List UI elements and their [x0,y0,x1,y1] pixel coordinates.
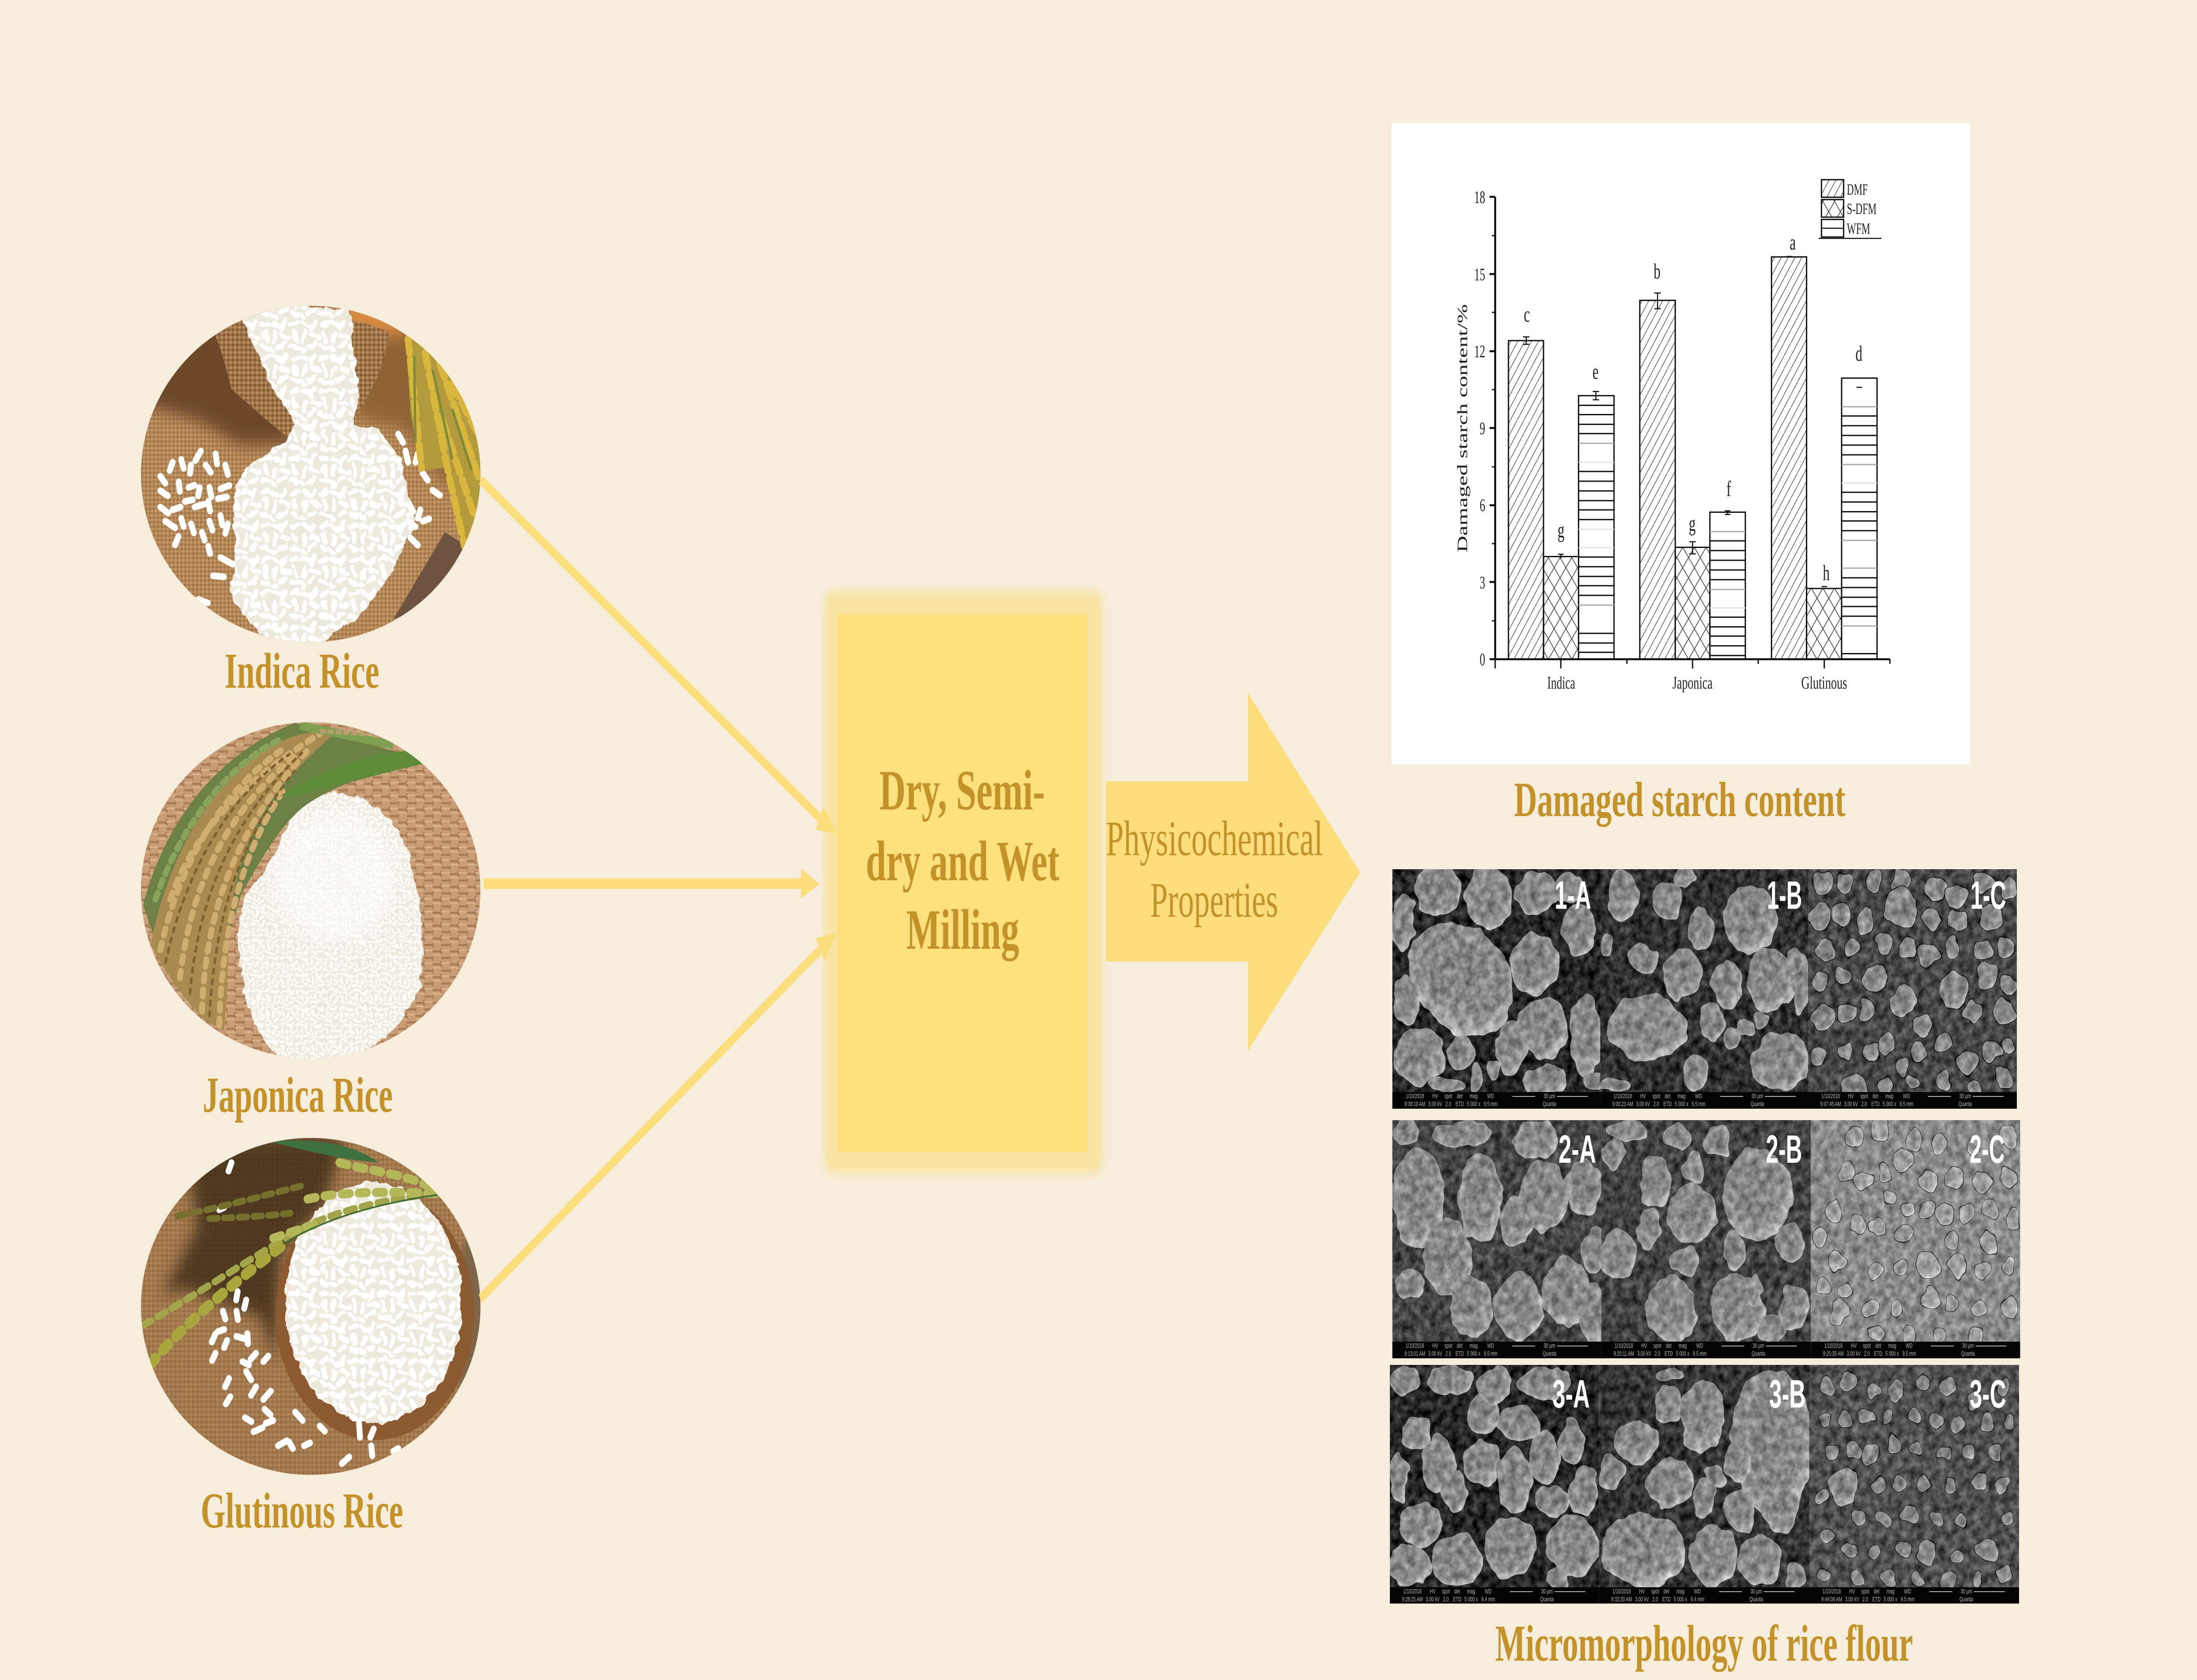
micrograph 3-A: 1/10/2018 [1403,1588,1421,1595]
micrograph 1-A: 30 µm [1544,1092,1555,1100]
panel: damaged starch bar chart [1392,123,1970,765]
micrograph 2-B: 1/10/2018 [1615,1342,1633,1350]
label: physicochemical properties: Physicochemical [1106,811,1323,866]
micrograph 1-B: 1-B [1767,873,1802,917]
significance letters: b [1653,260,1660,284]
micrograph 1-A: det [1457,1092,1463,1100]
legend labels [1847,181,1877,237]
micrograph 3-A: spot [1442,1588,1450,1595]
arrow: indica to milling [481,480,837,833]
chart legend swatches [1819,180,1882,239]
micrograph 1-A: 9.5 mm [1484,1100,1497,1108]
micrograph 1-B: HV [1640,1092,1646,1100]
micrograph 3-A: 3-A [1552,1372,1590,1416]
significance letters: e [1592,360,1599,384]
micrograph 1-A: ETD [1456,1100,1464,1108]
micrograph 3-C: 3-C [1969,1372,2006,1416]
micrograph 3-C: 9:44:06 AM [1821,1596,1842,1603]
micrograph 3-A: WD [1485,1588,1492,1595]
significance letters: h [1823,561,1830,585]
micrograph 1-B: det [1664,1092,1671,1100]
arrow: japonica to milling [484,868,819,898]
legend labels: DMF [1847,181,1868,198]
micrograph 2-C: 9.5 mm [1902,1350,1916,1357]
y axis numbers: 0 [1480,650,1485,670]
micrograph 1-B: ETD [1664,1100,1671,1108]
micrograph 1-B: 2.0 [1653,1100,1659,1108]
micrograph 3-A: 9.4 mm [1481,1596,1495,1603]
micrograph 1-A: 2.0 [1446,1100,1451,1108]
micrograph 3-A: ETD [1453,1596,1461,1603]
micrograph 3-C: 30 µm [1961,1588,1972,1595]
micrograph 1-B: 9:00:23 AM [1612,1100,1633,1108]
micrograph 2-B: HV [1641,1342,1647,1350]
panel: SEM micrographs [1384,862,2027,1604]
micrograph 2-C: 2-C [1969,1127,2005,1171]
micrograph 2-A: 9.5 mm [1484,1350,1497,1357]
micrograph 1-C: HV [1848,1092,1854,1100]
micrograph 2-A: HV [1432,1342,1438,1350]
micrograph 1-C: 1/10/2018 [1821,1092,1840,1100]
micrograph 3-A: Quanta [1540,1596,1554,1603]
micrograph 3-B: Quanta [1750,1596,1763,1603]
micrograph 1-A: spot [1444,1092,1452,1100]
micrograph 1-A: WD [1487,1092,1494,1100]
arrow: physicochemical properties [1106,693,1360,1051]
micrograph 3-C: 1/10/2018 [1823,1588,1841,1595]
micrograph 3-A: 5 000 x [1465,1596,1478,1603]
micrograph 3-B: det [1664,1588,1669,1595]
micrograph 2-C: 2.0 [1864,1350,1870,1357]
micrograph 2-A: 3.00 kV [1428,1350,1443,1357]
micrograph 3-B: 9:32:20 AM [1611,1596,1632,1603]
micrograph 3-C: spot [1861,1588,1869,1595]
micrograph 3-B: 30 µm [1751,1588,1762,1595]
micrograph 2-C [1805,1114,2027,1358]
micrograph 3-B: spot [1651,1588,1659,1595]
micrograph 2-A: Quanta [1543,1350,1556,1357]
micrograph 1-B: 3.00 kV [1636,1100,1650,1108]
micrograph 3-A: 30 µm [1541,1588,1553,1595]
micrograph 2-A: mag [1470,1342,1478,1350]
micrograph 3-A: det [1454,1588,1460,1595]
micrograph 2-A: 2-A [1559,1127,1596,1171]
micrograph 2-B: 9.5 mm [1693,1350,1707,1357]
micrograph 2-C: det [1875,1342,1881,1350]
micrograph 1-B [1594,862,1815,1109]
micrograph 1-C: det [1873,1092,1878,1100]
heading: micromorphology of rice flour: Micromorphology of rice flour [1495,1615,1913,1672]
micrograph 1-C: 1-C [1970,873,2006,917]
micrograph 2-A: spot [1444,1342,1452,1350]
micrograph 2-C: 1/10/2018 [1824,1342,1842,1350]
micrograph 1-A: 1-A [1555,873,1591,917]
micrograph 1-C: Quanta [1958,1100,1972,1108]
micrograph 1-B: 30 µm [1751,1092,1763,1100]
micrograph 1-A [1386,862,1608,1109]
micrograph 3-A: 9:28:25 AM [1402,1596,1423,1603]
label: physicochemical properties: Properties [1150,873,1278,928]
micrograph 1-B: WD [1695,1092,1702,1100]
x axis categories: Glutinous [1801,673,1847,693]
micrograph 3-A: mag [1467,1588,1475,1595]
micrograph 2-C: 9:25:35 AM [1823,1350,1844,1357]
y axis numbers [1474,188,1485,670]
micrograph 2-C: ETD [1874,1350,1882,1357]
legend labels: WFM [1847,220,1870,237]
micrograph 1-B: 5 000 x [1675,1100,1689,1108]
micrograph 2-B: WD [1696,1342,1703,1350]
box: milling process [824,591,1102,1174]
micrograph 3-A: 3.00 kV [1426,1596,1440,1603]
x axis categories: Indica [1547,673,1575,693]
micrograph 3-C: det [1874,1588,1880,1595]
significance letters: g [1558,519,1564,543]
significance letters: g [1689,512,1696,536]
micrograph 2-A: 9:13:01 AM [1404,1350,1425,1357]
micrograph 3-A [1384,1358,1605,1604]
micrograph 3-C: ETD [1872,1596,1881,1603]
micrograph 3-C: HV [1849,1588,1855,1595]
label: milling methods: Milling [906,898,1019,962]
micrograph 3-B: 5 000 x [1674,1596,1687,1603]
micrograph 2-C: mag [1888,1342,1896,1350]
y axis numbers: 3 [1480,573,1485,593]
significance letters [1524,231,1863,585]
label: glutinous rice: Glutinous Rice [201,1483,403,1538]
micrograph 2-B: 2-B [1766,1127,1802,1171]
micrograph 1-C: 9.5 mm [1900,1100,1913,1108]
micrograph 2-A: WD [1487,1342,1494,1350]
y axis numbers: 18 [1474,188,1485,207]
significance letters: a [1790,231,1796,255]
micrograph 1-C: spot [1860,1092,1868,1100]
photo: indica rice [141,306,481,642]
micrograph 3-A: 2.0 [1443,1596,1449,1603]
micrograph 3-B [1593,1358,1815,1604]
micrograph 1-A: mag [1470,1092,1478,1100]
micrograph 3-B: ETD [1662,1596,1671,1603]
micrograph 1-B: mag [1678,1092,1686,1100]
micrograph 1-C: 2.0 [1861,1100,1867,1108]
bars and axes [1490,180,1890,668]
micrograph 3-B: HV [1639,1588,1645,1595]
label: indica rice: Indica Rice [225,643,379,699]
micrograph 2-B: spot [1653,1342,1661,1350]
micrograph 2-C: spot [1863,1342,1871,1350]
y axis numbers: 9 [1480,419,1485,439]
micrograph 1-C: 30 µm [1959,1092,1971,1100]
micrograph 3-C: Quanta [1960,1596,1973,1603]
micrograph 3-A: HV [1430,1588,1436,1595]
micrograph 3-B: 9.4 mm [1691,1596,1704,1603]
photo: glutinous rice [141,1138,481,1475]
micrograph 2-A: det [1457,1342,1463,1350]
micrograph 3-C: 2.0 [1862,1596,1868,1603]
micrograph 3-B: 1/10/2018 [1613,1588,1631,1595]
micrograph 2-C: WD [1906,1342,1913,1350]
y axis numbers: 12 [1474,342,1485,362]
label: milling methods: Dry, Semi- [879,759,1045,822]
micrograph 1-A: 9:09:10 AM [1404,1100,1425,1108]
micrograph 2-B: 3.00 kV [1637,1350,1651,1357]
micrograph 3-B: 3.00 kV [1635,1596,1649,1603]
micrograph 1-C: 3.00 kV [1844,1100,1858,1108]
micrograph 1-B: 9.5 mm [1692,1100,1705,1108]
micrograph 2-B: ETD [1664,1350,1673,1357]
label: physicochemical properties [1106,811,1323,928]
micrograph 2-B: 5 000 x [1676,1350,1689,1357]
photo: japonica rice [141,722,481,1059]
micrograph 2-A [1386,1114,1607,1358]
micrograph 1-B: Quanta [1751,1100,1764,1108]
micrograph 2-C: 5 000 x [1885,1350,1899,1357]
micrograph 3-B: 3-B [1769,1372,1805,1416]
micrograph 3-B: 2.0 [1652,1596,1658,1603]
micrograph 3-C: 9.5 mm [1901,1596,1914,1603]
micrograph 2-A: ETD [1456,1350,1464,1357]
micrograph 3-C: 3.00 kV [1845,1596,1859,1603]
micrograph 2-A: 30 µm [1544,1342,1555,1350]
micrograph 1-C [1802,862,2023,1109]
micrograph 3-B: mag [1676,1588,1685,1595]
micrograph 3-C: WD [1904,1588,1911,1595]
micrograph 1-A: Quanta [1543,1100,1556,1108]
label: milling methods: dry and Wet [866,830,1059,893]
y axis numbers: 15 [1474,265,1485,285]
micrograph 2-B: 2.0 [1654,1350,1660,1357]
micrograph 3-C [1803,1358,2025,1604]
significance letters: d [1856,342,1863,366]
x axis categories: Japonica [1672,673,1713,693]
micrograph 2-B: mag [1679,1342,1687,1350]
significance letters: c [1524,303,1530,327]
micrograph 1-C: 5 000 x [1883,1100,1896,1108]
micrograph 2-B: 30 µm [1753,1342,1764,1350]
micrograph 1-A: HV [1432,1092,1438,1100]
heading: damaged starch content: Damaged starch content [1514,773,1845,827]
micrograph 2-C: Quanta [1961,1350,1975,1357]
micrograph 2-A: 1/10/2018 [1406,1342,1424,1350]
micrograph 3-B: WD [1694,1588,1701,1595]
micrograph 1-A: 1/10/2018 [1406,1092,1424,1100]
y axis numbers: 6 [1480,496,1485,515]
micrograph 2-B: det [1666,1342,1671,1350]
micrograph 3-C: mag [1886,1588,1895,1595]
micrograph 2-B: Quanta [1752,1350,1765,1357]
micrograph 2-C: 3.00 kV [1847,1350,1861,1357]
micrograph 2-B [1595,1114,1816,1358]
micrograph 2-C: 30 µm [1962,1342,1974,1350]
micrograph 1-B: spot [1653,1092,1660,1100]
y axis title: Damaged starch content/% [1454,304,1470,552]
micrograph 3-C: 5 000 x [1884,1596,1897,1603]
micrograph 2-A: 2.0 [1446,1350,1451,1357]
micrograph 2-B: 9:20:11 AM [1613,1350,1634,1357]
micrograph 1-C: WD [1903,1092,1910,1100]
micrograph 2-C: HV [1851,1342,1857,1350]
legend labels: S-DFM [1847,200,1877,218]
micrograph 1-C: ETD [1871,1100,1879,1108]
micrograph 1-C: 9:07:45 AM [1820,1100,1841,1108]
arrow: glutinous to milling [480,933,837,1299]
significance letters: f [1726,477,1731,501]
label: milling methods [866,759,1059,962]
micrograph 1-C: mag [1885,1092,1893,1100]
micrograph 1-A: 3.00 kV [1428,1100,1443,1108]
x axis categories [1547,673,1847,693]
label: japonica rice: Japonica Rice [203,1067,393,1123]
micrograph 1-A: 5 000 x [1467,1100,1481,1108]
micrograph 2-A: 5 000 x [1467,1350,1481,1357]
micrograph 1-B: 1/10/2018 [1613,1092,1632,1100]
